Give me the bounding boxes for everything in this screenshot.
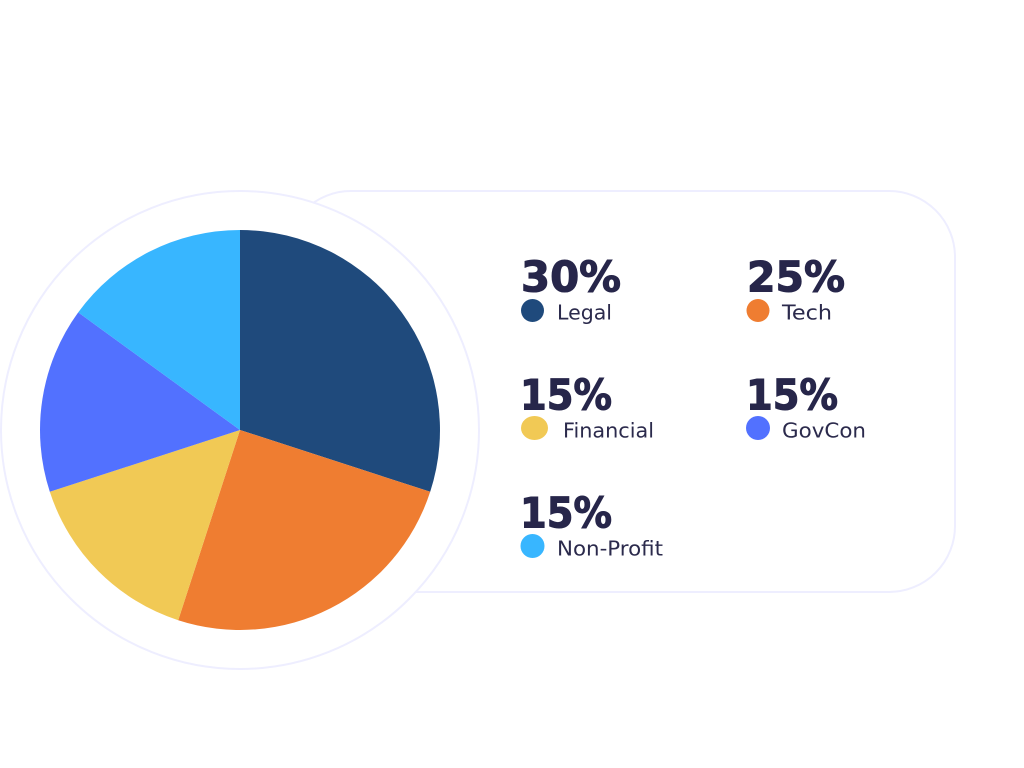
slice: Non-Profit 15% bbox=[78, 230, 240, 430]
legend item: Tech: 25% bbox=[747, 252, 845, 302]
legend item: Tech: Tech bbox=[781, 300, 832, 324]
legend item: GovCon bbox=[746, 370, 866, 442]
legend item: Non-Profit: 15% bbox=[520, 488, 612, 538]
legend item: Financial: 15% bbox=[520, 370, 612, 420]
legend item: Non-Profit: Non-Profit bbox=[557, 536, 663, 560]
legend item: Tech bbox=[746, 252, 845, 324]
panel: legend card bbox=[285, 191, 955, 592]
legend item: GovCon: 15% bbox=[746, 370, 838, 420]
slice: Tech 25% bbox=[178, 430, 430, 630]
legend item: Legal: Legal bbox=[557, 300, 612, 324]
legend item: Financial bbox=[520, 370, 654, 442]
legend item: Legal: 30% bbox=[521, 252, 621, 302]
pie chart bbox=[40, 230, 440, 630]
slice: GovCon 15% bbox=[40, 312, 240, 492]
legend item: Legal bbox=[521, 252, 621, 324]
slice: Legal 30% bbox=[240, 230, 440, 492]
slice: Financial 15% bbox=[50, 430, 240, 620]
legend item: Non-Profit bbox=[520, 488, 663, 560]
outer ring around pie bbox=[1, 191, 479, 669]
legend item: GovCon: GovCon bbox=[782, 418, 866, 442]
legend item: Financial: Financial bbox=[563, 418, 654, 442]
